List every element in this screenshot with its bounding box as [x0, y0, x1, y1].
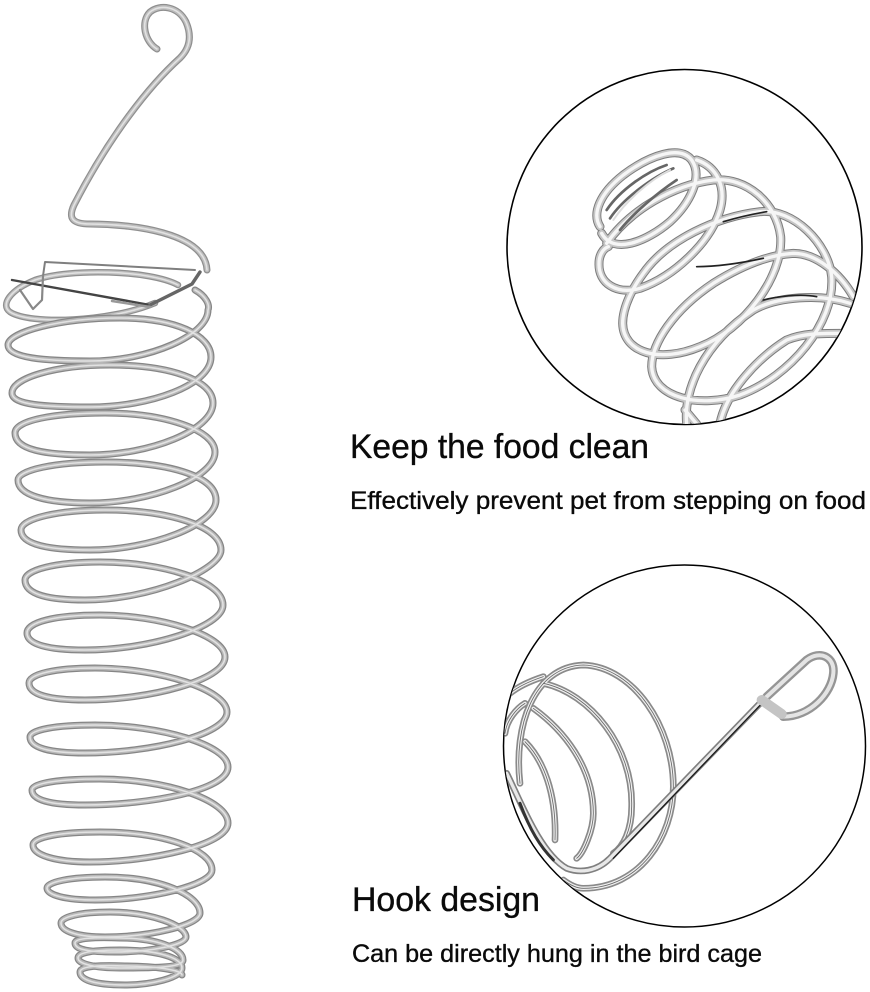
text: hook design description: Can be directly hung in the bird cage — [352, 940, 762, 968]
eyelet loop — [767, 655, 833, 717]
heading: hook design: Hook design — [352, 881, 540, 919]
hanging hook wire — [71, 7, 207, 270]
coil body — [8, 290, 228, 985]
spiral feeder with hook — [6, 7, 228, 985]
coil close-up wire — [597, 153, 853, 424]
heading: keep the food clean: Keep the food clean — [350, 428, 649, 466]
text: keep the food clean description: Effectively prevent pet from stepping on food — [350, 487, 866, 515]
hook close-up wire — [505, 655, 833, 888]
wire clip at top — [12, 262, 200, 309]
top rim ring — [6, 272, 178, 320]
detail circle: hook close-up — [504, 565, 866, 927]
detail circle: coil close-up — [507, 70, 862, 424]
